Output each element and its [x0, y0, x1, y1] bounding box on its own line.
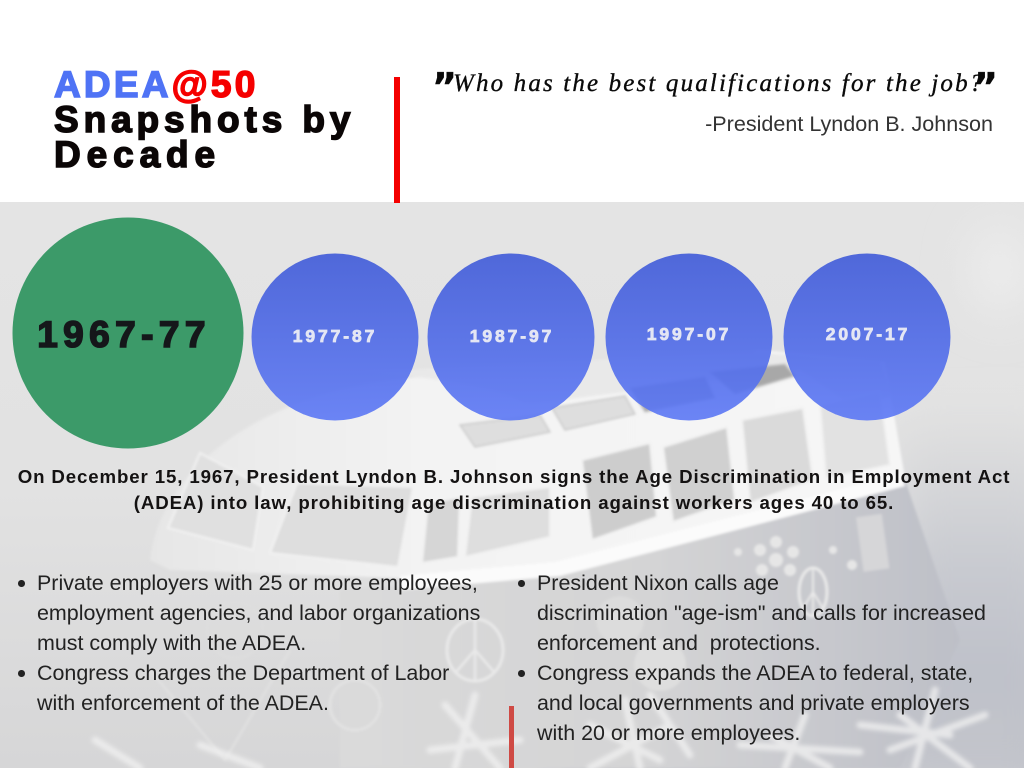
title line: Decade: Decade — [54, 134, 221, 175]
active decade: 1967-77: 1967-77 — [37, 314, 211, 355]
roof rack — [363, 352, 892, 410]
decade: 1997-07 — [606, 254, 772, 420]
flowers on the van — [596, 514, 889, 691]
bullet 1: President Nixon calls age discrimination "age-ism" and calls for increased enforcement and protections. — [537, 571, 986, 655]
title line: Snapshots by: Snapshots by — [54, 99, 355, 140]
red divider line, lower — [509, 706, 514, 768]
chrome strip — [400, 474, 905, 590]
title — [54, 64, 355, 175]
title line: ADEA@50: ADEA@50 — [54, 64, 258, 105]
icon: closing quote mark: ” — [973, 65, 998, 109]
red divider line, header — [394, 77, 400, 203]
daisies along the bottom — [95, 690, 985, 768]
decade: 1997-07: 1997-07 — [647, 324, 731, 344]
quote — [432, 65, 998, 109]
van lower body — [340, 480, 960, 768]
decade: 2007-17 — [784, 254, 950, 420]
decade: 1977-87 — [252, 254, 418, 420]
bullet 2: Congress charges the Department of Labor with enforcement of the ADEA. — [37, 661, 449, 715]
active decade: 1967-77 — [12, 218, 244, 448]
header panel — [0, 0, 1024, 202]
van roof and upper body — [150, 350, 905, 578]
decade: 1987-97: 1987-97 — [470, 326, 554, 346]
quote attribution: -President Lyndon B. Johnson — [705, 111, 993, 136]
left bullet list — [18, 571, 480, 715]
background photo: toy van in flowers — [0, 202, 1024, 768]
bullet 2: Congress expands the ADEA to federal, state, and local governments and private employers with 20 or more employees. — [537, 661, 973, 745]
decade: 1987-97 — [428, 254, 594, 420]
right bullet list — [518, 571, 986, 745]
icon: opening quote mark: ” — [432, 65, 457, 109]
intro text: On December 15, 1967, President Lyndon B. Johnson signs the Age Discrimination in Employment Act (ADEA) into law, prohibiting age discrimination against workers ages 40 to 65. — [18, 466, 1010, 513]
timeline of decades — [12, 218, 950, 448]
van windows — [168, 392, 890, 567]
quote text: Who has the best qualifications for the job? — [453, 70, 984, 97]
decade: 2007-17: 2007-17 — [826, 324, 910, 344]
decade: 1977-87: 1977-87 — [293, 326, 377, 346]
roof vents — [460, 364, 795, 447]
peace signs — [150, 568, 827, 760]
bullet 1: Private employers with 25 or more employees, employment agencies, and labor organizations must comply with the ADEA. — [37, 571, 480, 655]
